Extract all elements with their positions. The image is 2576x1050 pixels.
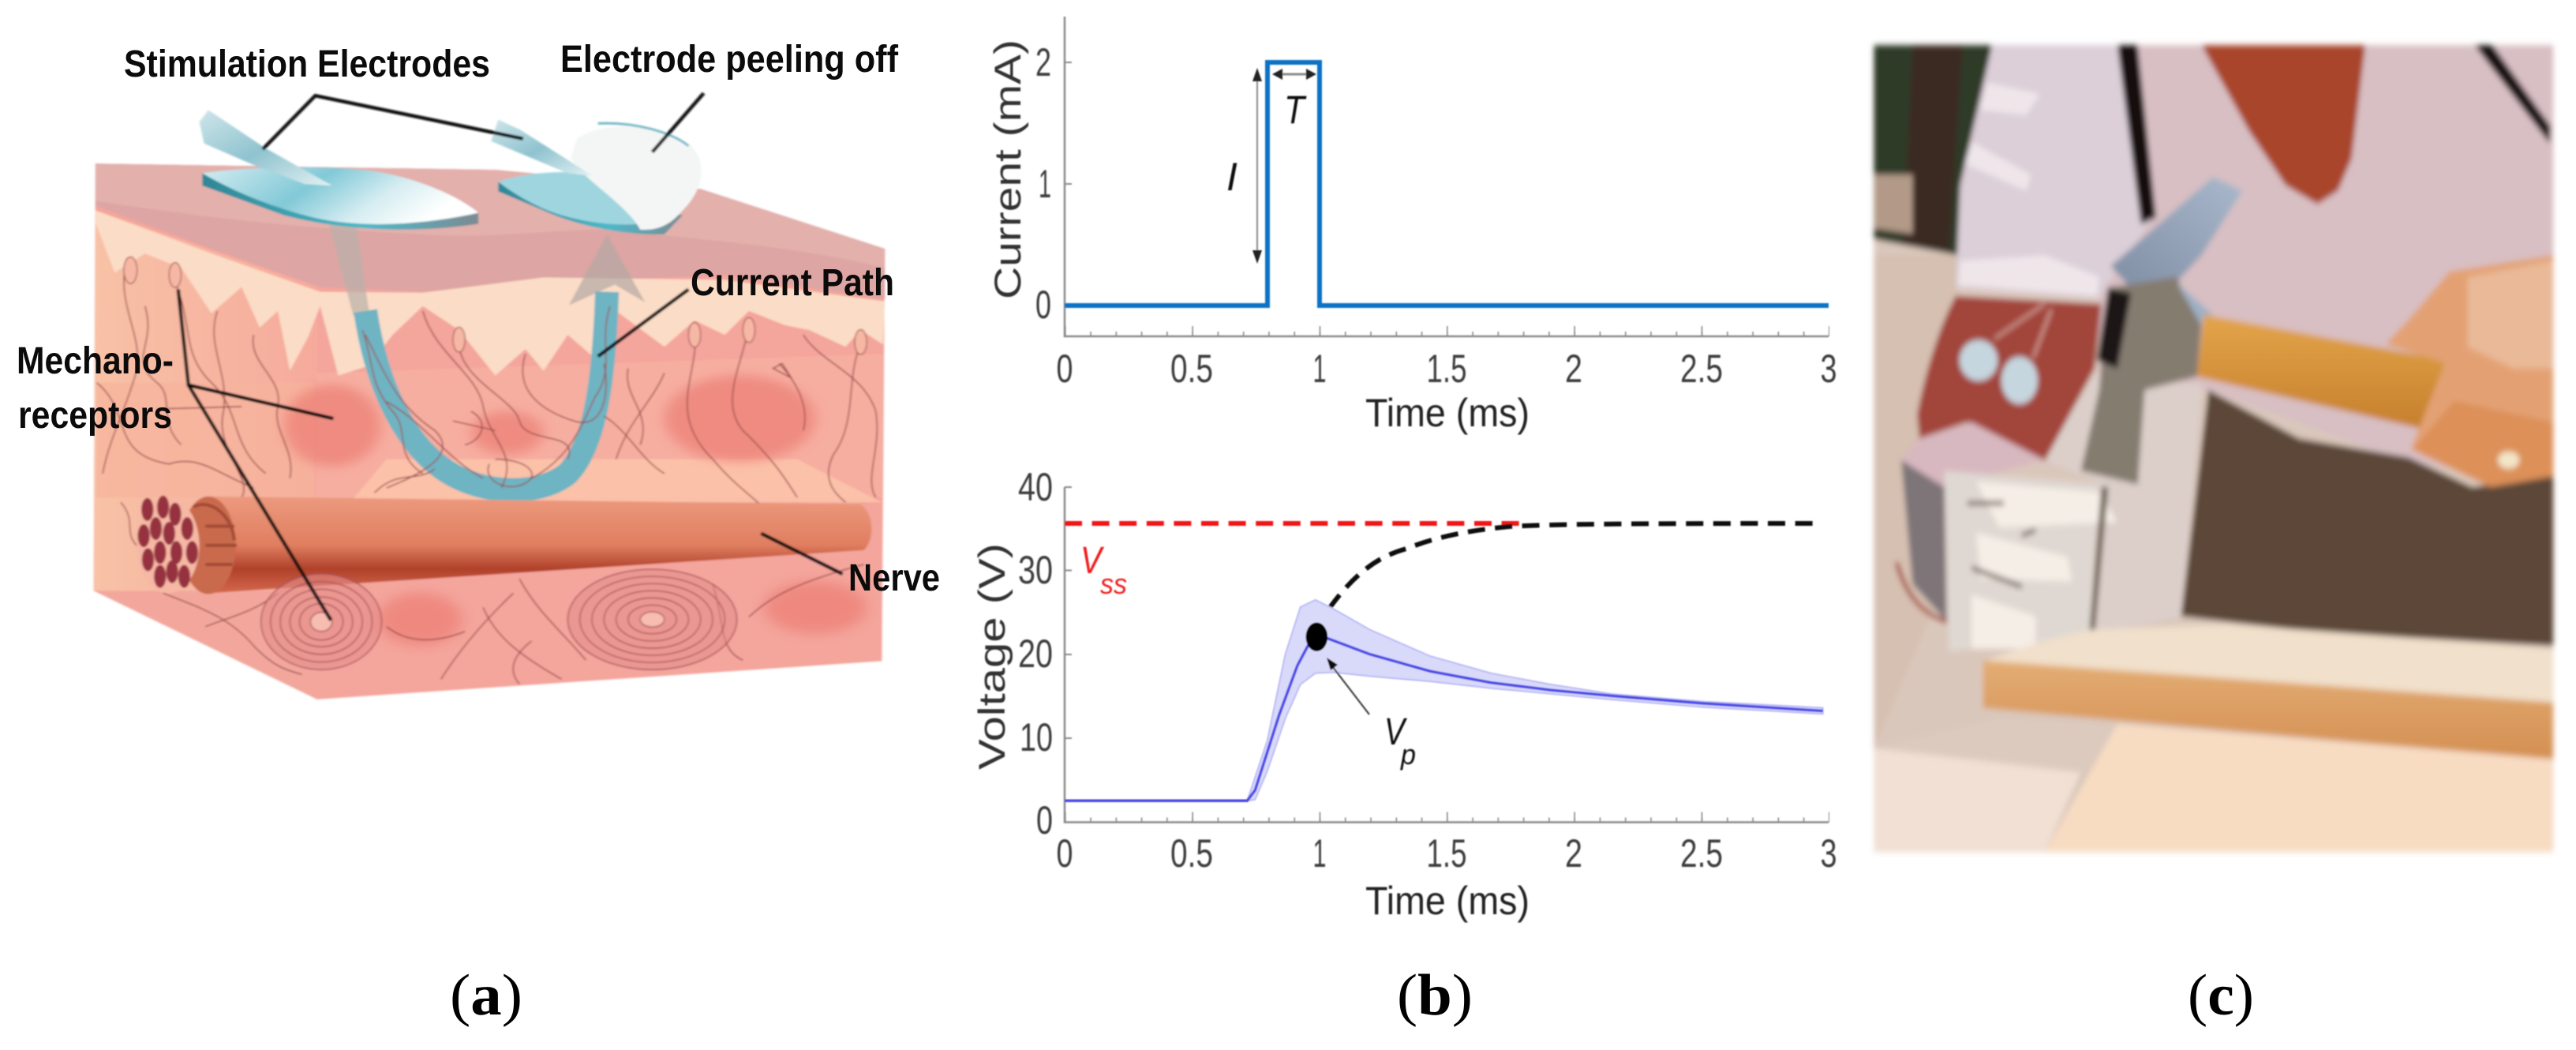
- x tick labels: [1056, 347, 1837, 391]
- y tick labels: 30: [1018, 548, 1053, 592]
- x tick labels: 2.5: [1680, 831, 1723, 876]
- x tick labels: 2: [1565, 347, 1582, 391]
- shirt: [1956, 45, 2553, 482]
- symbol I: I: [1226, 155, 1237, 199]
- y tick labels: 0: [1036, 798, 1053, 842]
- caption (a): (a): [450, 963, 522, 1028]
- x tick labels: 1: [1313, 347, 1326, 391]
- panel: skin cross-section diagram (a): [17, 39, 940, 699]
- y tick 1: 1: [1039, 162, 1051, 206]
- leader lines: [178, 93, 843, 621]
- x tick labels: 3: [1820, 347, 1837, 391]
- Vp arrow: [1327, 658, 1369, 714]
- y tick 2: 2: [1035, 40, 1051, 84]
- label: Electrode peeling off: Electrode peeling off: [560, 39, 899, 81]
- x tick labels: 0: [1056, 347, 1073, 391]
- shirt highlights: [1958, 83, 2099, 296]
- hammer handle: [2197, 314, 2447, 429]
- symbol Vss: ss: [1100, 568, 1127, 600]
- trousers: [2181, 390, 2553, 646]
- x tick labels: 1.5: [1427, 347, 1466, 391]
- x tick labels: 1: [1313, 831, 1326, 876]
- current axes: [1065, 17, 1829, 336]
- wooden plank: [1983, 624, 2553, 759]
- x tick labels: 1.5: [1427, 831, 1466, 876]
- sleeve: [1956, 45, 2154, 298]
- y tick labels: 40: [1018, 465, 1053, 509]
- label: Nerve: Nerve: [848, 557, 940, 599]
- symbol Vp: [1384, 711, 1416, 771]
- right hand: [2386, 255, 2553, 487]
- x axis title: Time (ms): [1365, 391, 1530, 435]
- symbol T: T: [1284, 88, 1307, 132]
- y tick labels: 10: [1020, 715, 1053, 759]
- caption (c): (c): [2188, 963, 2254, 1028]
- suspenders: [2117, 45, 2551, 224]
- x tick labels: 0.5: [1170, 831, 1213, 876]
- x tick labels: 2: [1565, 831, 1582, 876]
- mean voltage trace: [1065, 639, 1823, 801]
- nerve bundle: [137, 497, 871, 594]
- label: Stimulation Electrodes: Stimulation Electrodes: [124, 43, 490, 85]
- symbol Vp: p: [1400, 738, 1416, 771]
- x tick labels: 0.5: [1170, 347, 1213, 391]
- label: receptors: receptors: [18, 395, 172, 437]
- amplitude arrow I: [1252, 68, 1262, 264]
- hammer head: [2081, 177, 2242, 484]
- prosthetic hand: [1896, 422, 2117, 651]
- Vp marker: [1306, 623, 1327, 651]
- x tick labels: 0: [1056, 831, 1073, 876]
- electrode right, peeling: [491, 119, 702, 234]
- uncertainty band: [1247, 600, 1823, 801]
- lamellar corpuscle left: [261, 574, 382, 669]
- papilla receptors: [124, 257, 867, 354]
- forearm: [1917, 296, 2102, 461]
- x axis title: Time (ms): [1365, 879, 1530, 923]
- red steady-state line: [1065, 521, 1519, 526]
- y tick 0: 0: [1035, 283, 1051, 327]
- voltage axes: [1065, 487, 1829, 823]
- chart: voltage response: [971, 465, 1837, 923]
- current trace: [1065, 62, 1829, 306]
- x tick labels: [1056, 831, 1837, 876]
- y axis title: Current (mA): [987, 39, 1028, 299]
- ground background: [1874, 45, 2553, 853]
- y tick labels: [1018, 465, 1053, 842]
- nail: [2089, 487, 2108, 636]
- light background under arm: [2045, 374, 2201, 636]
- label: Mechano-: Mechano-: [17, 340, 174, 382]
- wooden table: [2045, 724, 2553, 853]
- panel: photo of prosthetic hand hammering a nail (c): [1874, 45, 2553, 853]
- lamellar corpuscle right: [567, 569, 737, 669]
- symbol Vp: V: [1384, 711, 1407, 753]
- nerve fascicles: [137, 496, 198, 588]
- current path: [329, 225, 645, 490]
- x tick labels: 3: [1820, 831, 1837, 876]
- chart: current pulse: [987, 17, 1837, 435]
- skin block: [94, 163, 885, 699]
- nerve endings: [96, 258, 877, 684]
- caption (b): (b): [1397, 963, 1473, 1028]
- width arrow T: [1272, 69, 1316, 80]
- forearm electrodes: [1960, 304, 2051, 404]
- y axis title: Voltage (V): [971, 543, 1013, 770]
- label: Current Path: Current Path: [691, 262, 894, 304]
- black dashed projection: [1329, 523, 1817, 609]
- chest skin: [2201, 45, 2365, 204]
- electrode left: [200, 110, 478, 230]
- symbol Vss: [1080, 540, 1127, 600]
- symbol Vss: V: [1080, 540, 1104, 582]
- y tick labels: 20: [1018, 632, 1053, 676]
- pink receptor blobs: [284, 376, 867, 646]
- x tick labels: 2.5: [1680, 347, 1723, 391]
